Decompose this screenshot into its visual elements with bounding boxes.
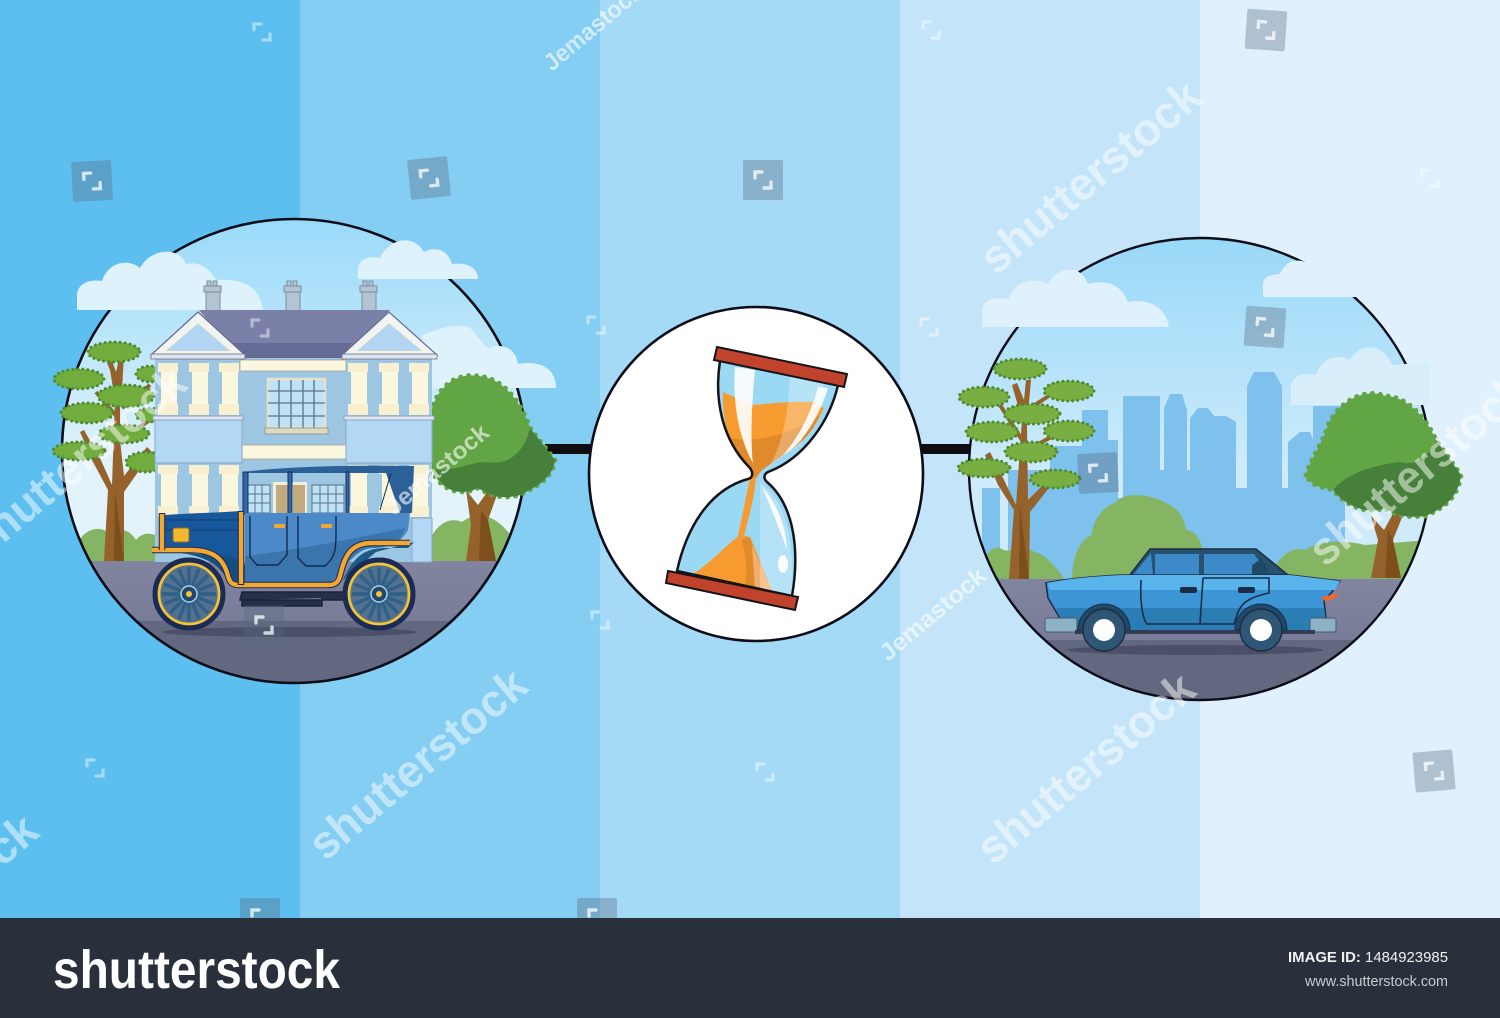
wheels [1078, 604, 1287, 651]
cloud: large left [982, 270, 1169, 327]
footer logo: shutterstock [53, 940, 341, 1000]
watermark: stock marks: shutterstock [298, 657, 537, 870]
lower columns [158, 465, 429, 517]
tree: right round tree [429, 376, 555, 561]
footer image id: IMAGE ID: 1484923985 [1288, 949, 1448, 966]
upper columns [158, 363, 429, 415]
road shadow [162, 627, 418, 637]
panel: hourglass circle [589, 307, 923, 641]
cloud: right [1291, 347, 1430, 405]
circle outline [62, 219, 526, 683]
gold trim [152, 543, 410, 585]
tree: left pine [53, 342, 166, 561]
hourglass glass [677, 361, 838, 596]
door and ground floor windows [247, 482, 344, 514]
hourglass sand [693, 365, 832, 596]
footer bar [0, 918, 1500, 1018]
roof [199, 310, 390, 359]
house [151, 281, 437, 562]
body [245, 513, 410, 582]
sky, skyline, bushes and road [965, 236, 1435, 705]
connector: left circle to hourglass [545, 444, 595, 454]
chassis [240, 592, 345, 606]
circle outline [969, 238, 1431, 700]
hourglass bottom cap [666, 571, 798, 610]
panel: present scene with modern car [958, 236, 1461, 705]
cloud: small upper right [358, 240, 478, 279]
tree: right round tree [1306, 394, 1461, 578]
body [1046, 575, 1340, 630]
watermark: stock marks: Jemastock [381, 418, 495, 521]
cloud: top right [1263, 260, 1360, 297]
headlamp [173, 528, 189, 542]
cloud: right of house [422, 326, 556, 388]
pediments [151, 312, 437, 359]
watermark: small corner icons [87, 22, 1438, 780]
car: vintage [152, 466, 418, 637]
footer website: www.shutterstock.com [1304, 974, 1448, 990]
city skyline [982, 372, 1345, 580]
cabin [1129, 549, 1288, 576]
watermark: stock marks: Jemastock [875, 562, 992, 667]
sky and road of past scene [60, 218, 530, 686]
chimneys [204, 281, 377, 311]
cloud: large left [77, 252, 263, 310]
roof and posts [243, 466, 414, 513]
hourglass top cap [714, 347, 847, 387]
tree: left pine [958, 359, 1094, 579]
walls [155, 358, 432, 562]
watermark: stock marks: shutterstock [966, 661, 1205, 874]
balconies [153, 416, 434, 562]
bumpers [1045, 618, 1077, 632]
car: modern sedan [1045, 549, 1340, 655]
panel: past scene with vintage car [53, 218, 556, 686]
window [265, 379, 328, 434]
doors [250, 516, 336, 566]
connector: hourglass to right circle [918, 444, 974, 454]
watermark: stock marks: shutterstock [969, 69, 1211, 284]
road shadow [1067, 645, 1323, 655]
wheels [155, 560, 223, 628]
